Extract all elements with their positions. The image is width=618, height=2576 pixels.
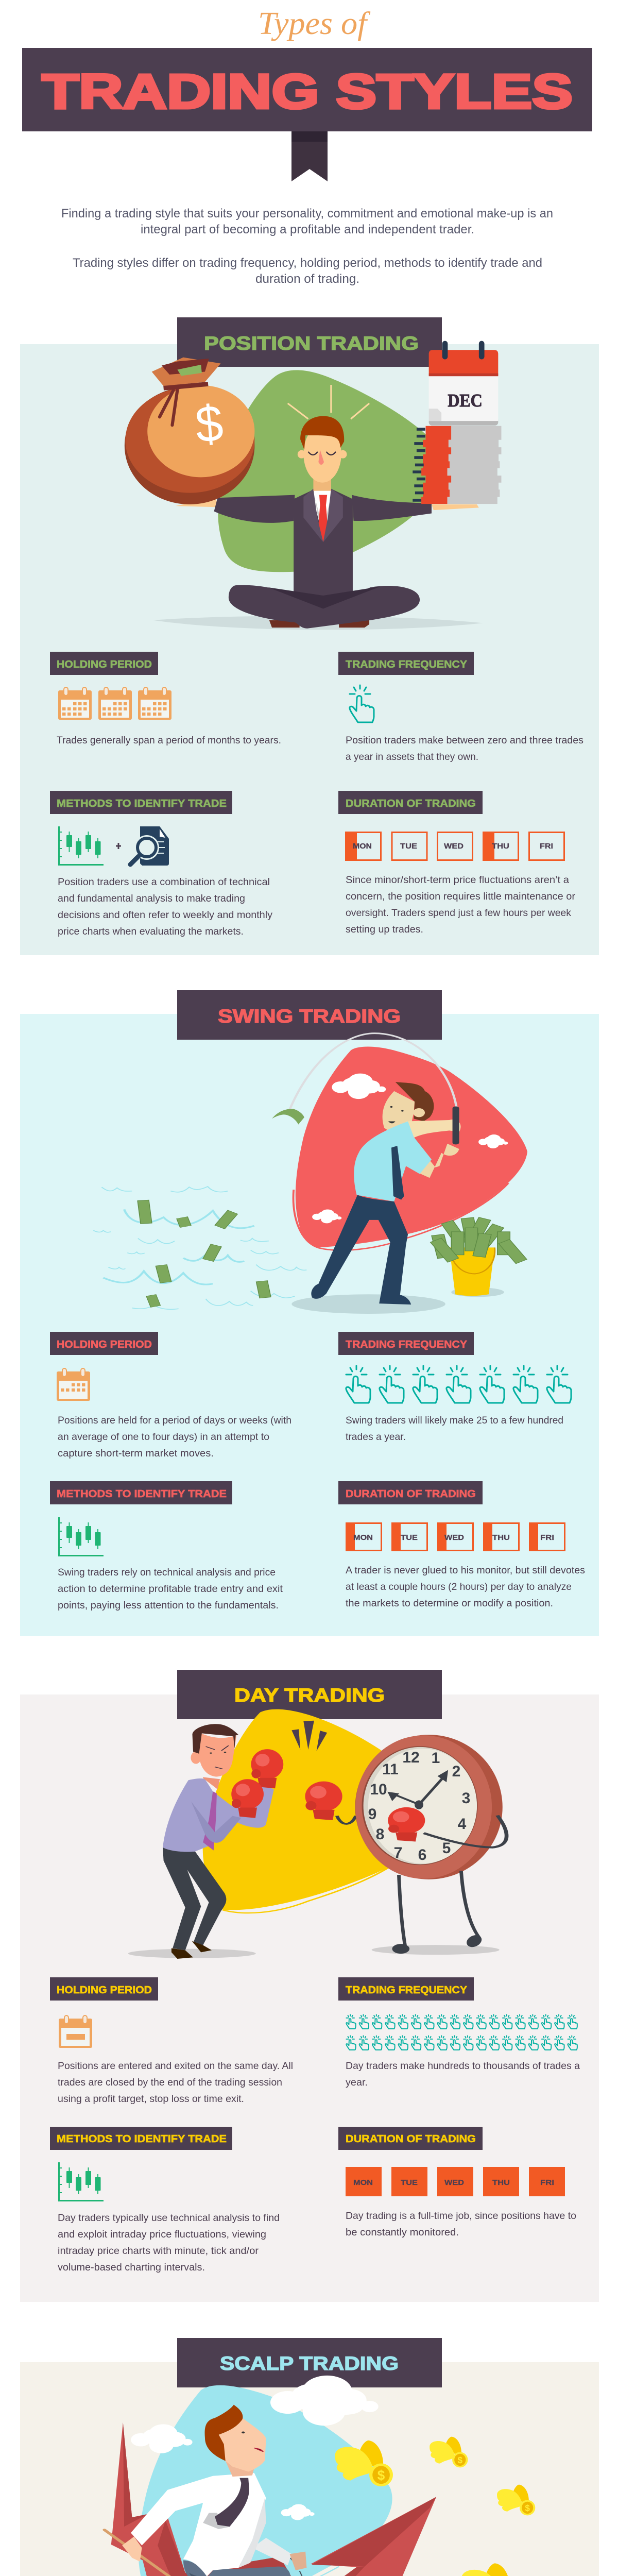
weekday boxes: THU: [492, 2178, 510, 2187]
text: methods: Swing traders rely on technical analysis and price: [58, 1567, 276, 1578]
text: duration: Day trading is a full-time job, since positions have to: [346, 2211, 576, 2222]
text: methods: and exploit intraday price fluctuations, viewing: [58, 2229, 266, 2240]
icon: candlestick chart: [58, 826, 104, 866]
panel: day trading: [20, 1670, 599, 2302]
icon: plus sign: [116, 843, 121, 849]
illustration: meditating trader with money bag and calendars: [125, 341, 501, 630]
illustration: trader riding arrow and catching coins: [105, 2376, 535, 2576]
heading: position trading: [177, 317, 442, 367]
heading: scalp trading: SCALP TRADING: [220, 2353, 399, 2374]
text: trading frequency: [346, 735, 583, 762]
label: holding period: [50, 1977, 158, 2001]
clock numerals: 7: [394, 1844, 402, 1861]
weekday boxes: [346, 2167, 565, 2196]
text: holding period: Positions are entered and exited on the same day. All: [58, 2061, 293, 2072]
illustration: trader boxing a clock: [128, 1709, 507, 1959]
intro text: [61, 207, 553, 286]
text: trading frequency: [346, 2061, 580, 2088]
weekday boxes: MON: [353, 2178, 373, 2187]
text: holding period: an average of one to four days) in an attempt to: [58, 1432, 269, 1443]
text: duration: be constantly monitored.: [346, 2227, 459, 2238]
icon: candlestick chart: [58, 2162, 104, 2201]
label: trading frequency: TRADING FREQUENCY: [346, 1339, 468, 1350]
heading: scalp trading: [177, 2338, 442, 2387]
weekday boxes: TUE: [400, 842, 417, 851]
text: duration: Since minor/short-term price fluctuations aren’t a: [346, 875, 569, 886]
label: methods to identify trade: METHODS TO IDENTIFY TRADE: [57, 1488, 227, 1500]
text: duration: the markets to determine or modify a position.: [346, 1598, 553, 1609]
text: methods: [58, 1567, 283, 1611]
text: methods: and fundamental analysis to make trading: [58, 893, 245, 904]
label: trading frequency: [338, 1977, 474, 2001]
label: duration of trading: [338, 1481, 483, 1504]
icon: candlestick chart: [58, 1517, 104, 1556]
icon: three calendars: [58, 687, 171, 720]
label: holding period: HOLDING PERIOD: [57, 1985, 152, 1996]
weekday boxes: WED: [444, 842, 464, 851]
weekday boxes: THU: [492, 1533, 510, 1542]
panel: swing trading: [20, 990, 599, 1636]
label: duration of trading: DURATION OF TRADING: [346, 2133, 476, 2145]
text: methods: decisions and often refer to weekly and monthly: [58, 910, 273, 921]
label: trading frequency: TRADING FREQUENCY: [346, 659, 468, 670]
icons: two rows of tap hands: [346, 2014, 577, 2050]
clock numerals: 4: [458, 1816, 467, 1833]
text: methods: price charts when evaluating the markets.: [58, 926, 244, 937]
clock numerals: 10: [370, 1781, 387, 1798]
label: duration of trading: [338, 2127, 483, 2150]
text: trading frequency: a year in assets that they own.: [346, 752, 478, 762]
text: methods: Day traders typically use technical analysis to find: [58, 2213, 280, 2224]
text: methods: intraday price charts with minute, tick and/or: [58, 2246, 259, 2257]
icons: seven tap hands: [346, 1366, 571, 1403]
text: duration: setting up trades.: [346, 924, 423, 935]
heading: day trading: DAY TRADING: [234, 1685, 385, 1706]
weekday boxes: MON: [353, 842, 372, 851]
label: holding period: HOLDING PERIOD: [57, 659, 152, 670]
label: trading frequency: [338, 652, 474, 675]
intro text: duration of trading.: [255, 272, 359, 286]
text: duration: concern, the position requires little maintenance or: [346, 891, 576, 902]
heading: position trading: POSITION TRADING: [204, 333, 419, 354]
illustration: meditating trader with money bag and calendars: DEC: [448, 391, 483, 411]
clock numerals: 9: [368, 1806, 376, 1823]
weekday boxes: FRI: [540, 842, 553, 851]
illustration: meditating trader with money bag and calendars: $: [193, 394, 225, 454]
label: trading frequency: TRADING FREQUENCY: [346, 1985, 468, 1996]
text: holding period: Positions are held for a period of days or weeks (with: [58, 1415, 291, 1426]
clock numerals: 5: [442, 1840, 451, 1857]
weekday boxes: THU: [492, 842, 509, 851]
text: trading frequency: Position traders make between zero and three trades: [346, 735, 583, 746]
text: holding period: Trades generally span a period of months to years.: [57, 735, 281, 746]
clock numerals: 12: [402, 1749, 420, 1766]
clock numerals: 1: [432, 1750, 440, 1767]
weekday boxes: WED: [444, 2178, 464, 2187]
label: trading frequency: [338, 1332, 474, 1355]
heading: day trading: [177, 1670, 442, 1719]
icon: document with magnifier: [130, 826, 169, 866]
clock numerals: 11: [382, 1761, 399, 1778]
clock numerals: [368, 1749, 470, 1863]
heading: swing trading: SWING TRADING: [218, 1006, 401, 1027]
icon: calendar with bar: [59, 2015, 92, 2048]
text: holding period: using a profit target, stop loss or time exit.: [58, 2094, 244, 2105]
weekday boxes: WED: [444, 1533, 464, 1542]
text: duration: at least a couple hours (2 hours) per day to analyze: [346, 1582, 572, 1592]
text: holding period: trades are closed by the end of the trading session: [58, 2077, 282, 2088]
weekday boxes: TUE: [401, 2178, 418, 2187]
label: duration of trading: DURATION OF TRADING: [346, 798, 476, 809]
title banner: TRADING STYLES: [42, 64, 573, 119]
panel: scalp trading: [20, 2338, 599, 2576]
clock numerals: 2: [452, 1763, 460, 1780]
text: methods: [58, 2213, 280, 2273]
text: trading frequency: year.: [346, 2077, 368, 2088]
weekday boxes: MON: [353, 1533, 373, 1542]
weekday boxes: TUE: [401, 1533, 418, 1542]
panel: position trading: [20, 317, 599, 955]
text: duration: [346, 2211, 576, 2238]
text: methods: action to determine profitable trade entry and exit: [58, 1584, 283, 1595]
title banner: [22, 48, 592, 181]
text: duration: oversight. Traders spend just a few hours per week: [346, 908, 571, 919]
weekday boxes: FRI: [540, 2178, 554, 2187]
weekday boxes: [345, 832, 564, 860]
text: holding period: [58, 2061, 293, 2105]
label: duration of trading: [338, 791, 483, 814]
label: holding period: [50, 652, 158, 675]
clock numerals: 8: [376, 1826, 384, 1843]
text: duration: [346, 1565, 585, 1609]
text: duration: [346, 875, 576, 935]
icon: tap hand: [350, 685, 374, 722]
text: methods: [58, 877, 273, 937]
heading: swing trading: [177, 990, 442, 1040]
text: holding period: capture short-term market moves.: [58, 1448, 214, 1459]
text: methods: points, paying less attention to the fundamentals.: [58, 1600, 279, 1611]
label: methods to identify trade: METHODS TO IDENTIFY TRADE: [57, 798, 227, 809]
label: methods to identify trade: METHODS TO IDENTIFY TRADE: [57, 2133, 227, 2145]
weekday boxes: [346, 1522, 564, 1551]
label: methods to identify trade: [50, 791, 232, 814]
illustration: trader fishing money: [93, 1033, 527, 1314]
weekday boxes: FRI: [540, 1533, 554, 1542]
label: methods to identify trade: [50, 1481, 232, 1504]
text: trading frequency: [346, 1415, 563, 1443]
text: methods: Position traders use a combination of technical: [58, 877, 270, 888]
title: Types of: Types of: [258, 6, 371, 41]
text: trading frequency: Day traders make hundreds to thousands of trades a: [346, 2061, 580, 2072]
icon: calendar: [57, 1368, 90, 1401]
label: holding period: HOLDING PERIOD: [57, 1339, 152, 1350]
intro text: Trading styles differ on trading frequency, holding period, methods to identify trade and: [73, 256, 542, 270]
text: methods: volume-based charting intervals.: [58, 2262, 205, 2273]
label: methods to identify trade: [50, 2127, 232, 2150]
label: duration of trading: DURATION OF TRADING: [346, 1488, 476, 1500]
clock numerals: 6: [418, 1846, 426, 1863]
intro text: integral part of becoming a profitable and independent trader.: [141, 223, 474, 236]
text: duration: A trader is never glued to his monitor, but still devotes: [346, 1565, 585, 1576]
text: trading frequency: trades a year.: [346, 1432, 406, 1443]
text: holding period: [58, 1415, 291, 1459]
clock numerals: 3: [462, 1790, 470, 1807]
label: holding period: [50, 1332, 158, 1355]
text: trading frequency: Swing traders will likely make 25 to a few hundred: [346, 1415, 563, 1426]
intro text: Finding a trading style that suits your personality, commitment and emotional make-up is an: [61, 207, 553, 221]
